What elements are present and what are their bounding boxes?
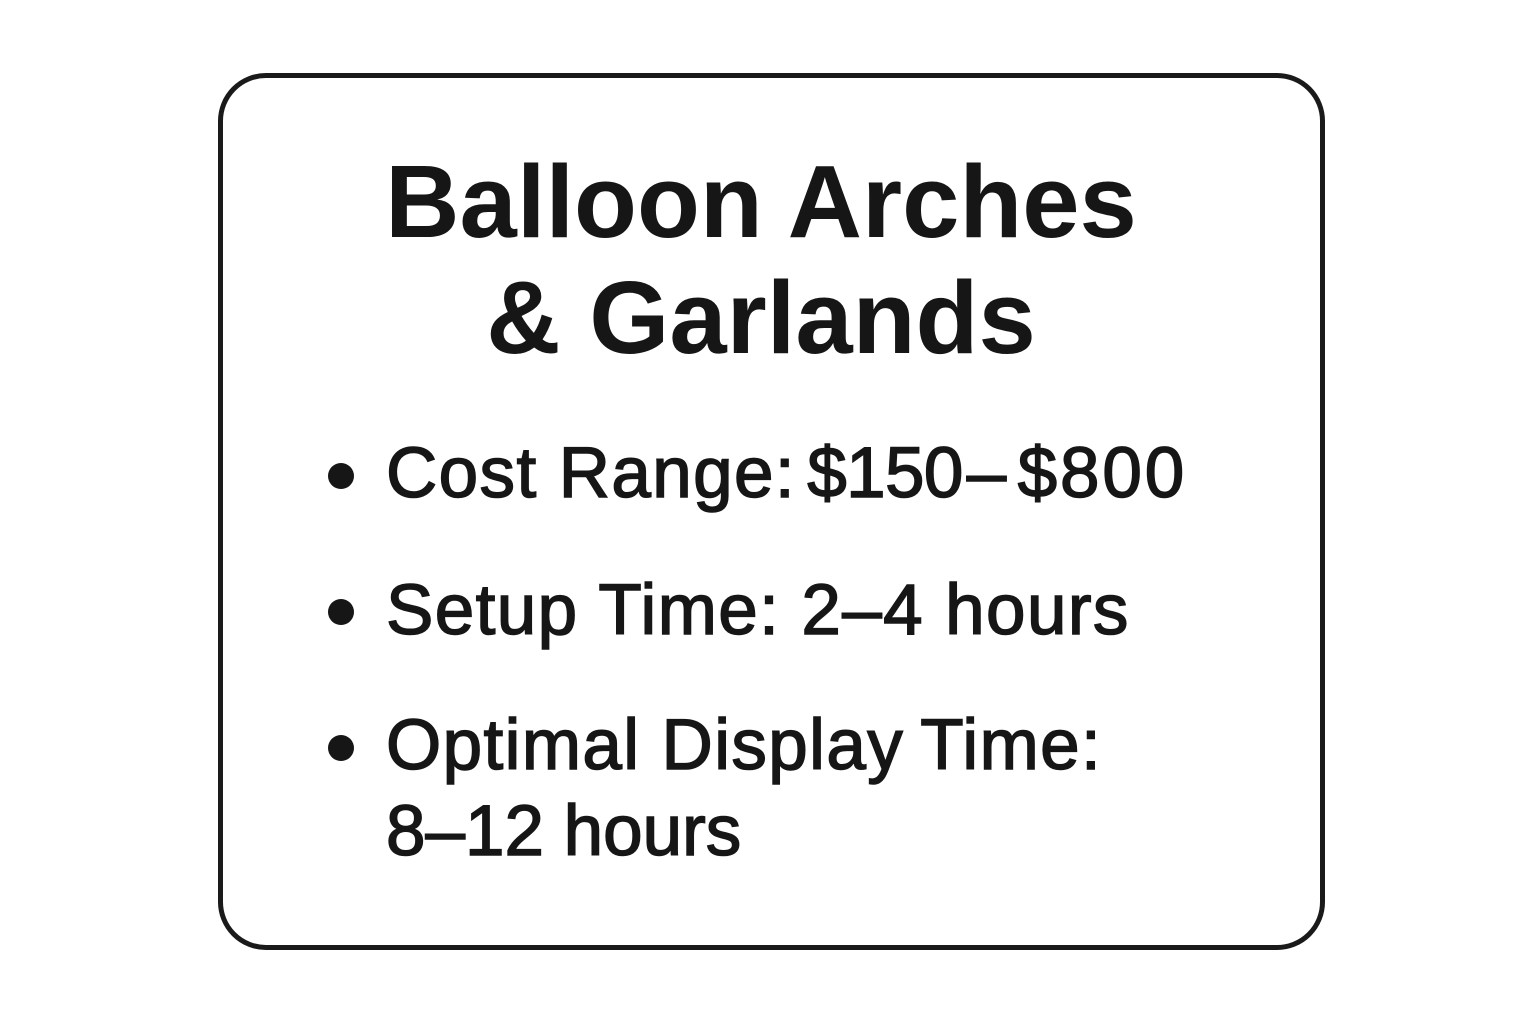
- text: optimal display time: Optimal Display Time:: [386, 706, 1102, 785]
- text: optimal display time: [386, 706, 1102, 871]
- bullet icon: cost: [328, 463, 354, 489]
- title: Balloon Arches: [385, 144, 1137, 259]
- panel: balloon arches card: [218, 73, 1325, 950]
- text: cost range: Cost Range: $150–$800: [386, 434, 1187, 513]
- bullet icon: display: [328, 735, 354, 761]
- bullet icon: setup: [328, 599, 354, 625]
- title: [385, 144, 1137, 375]
- text: setup time: Setup Time: 2–4 hours: [386, 571, 1130, 650]
- text: optimal display time: 8–12 hours: [386, 792, 741, 871]
- title: & Garlands: [486, 260, 1036, 375]
